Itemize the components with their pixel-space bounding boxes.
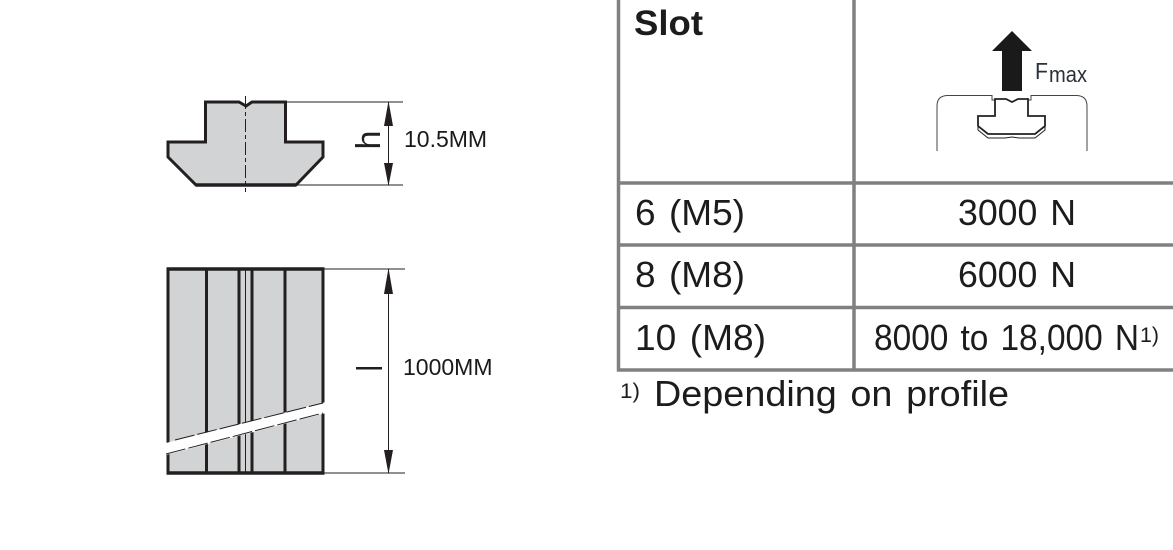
T-nut in slot (978, 99, 1045, 134)
row: 6 (M5): 6 (M5) (635, 192, 745, 233)
height dimension: h = 10.5MM: h (350, 131, 388, 149)
row: 6 (M5) (635, 192, 1076, 233)
length dimension: l = 1000MM: 1000MM (403, 354, 492, 380)
footnote: 1) (620, 380, 640, 403)
table: maximum force by slot size (617, 0, 1173, 372)
table grid (617, 0, 1173, 372)
label: Fmax: max (1049, 62, 1087, 87)
cross-section drawing of T-nut (168, 96, 323, 192)
height dimension: h = 10.5MM: 10.5MM (404, 126, 487, 152)
label: Fmax: F (1035, 58, 1048, 84)
column heading: Slot: Slot (634, 4, 703, 43)
profile outline (937, 96, 1087, 151)
side view drawing of T-nut with break (162, 268, 326, 474)
icon: upward force on slot profile (937, 31, 1087, 151)
label: Fmax (1035, 58, 1087, 87)
row: 10 (M8): 10 (M8) (635, 317, 766, 358)
row: 10 (M8): 1) (1140, 324, 1159, 347)
row: 8 (M8) (635, 254, 1076, 295)
footnote: Depending on profile (654, 373, 1009, 414)
row: 10 (M8): 8000 to 18,000 N (874, 317, 1139, 358)
row: 10 (M8) (635, 317, 1159, 358)
row: 8 (M8): 6000 N (958, 254, 1076, 295)
arrow: Fmax direction (992, 31, 1032, 91)
row: 8 (M8): 8 (M8) (635, 254, 745, 295)
row: 6 (M5): 3000 N (958, 192, 1076, 233)
length dimension: l = 1000MM (323, 268, 492, 474)
height dimension: h = 10.5MM (286, 101, 487, 186)
